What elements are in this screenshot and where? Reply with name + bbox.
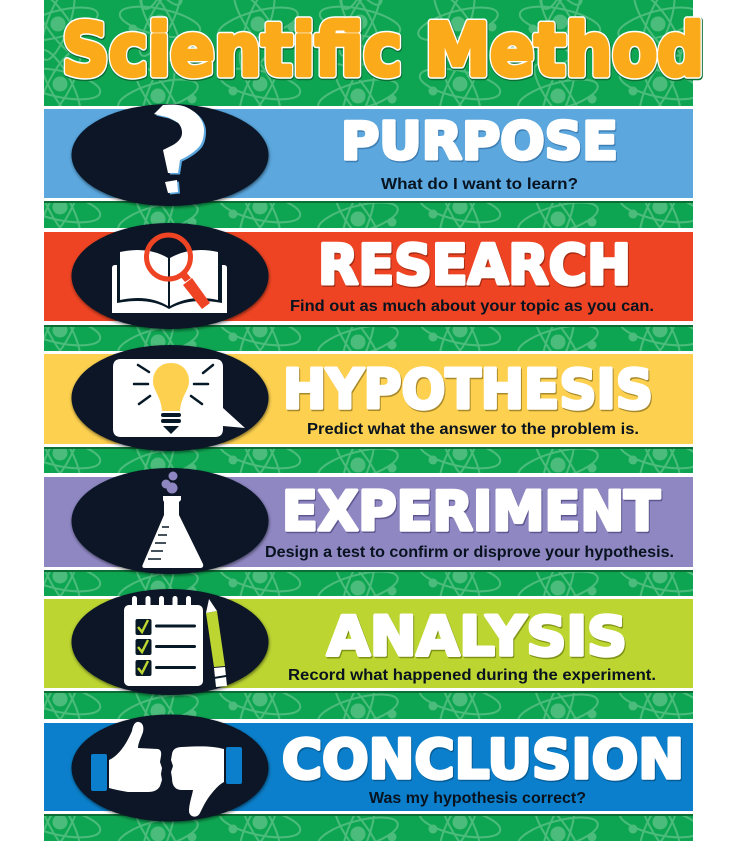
heading: purpose: PURPOSE	[342, 114, 619, 174]
band: purpose	[44, 106, 693, 203]
text: hypothesis prompt: Predict what the answer to the problem is.	[307, 421, 639, 438]
heading: purpose: PURPOSE	[341, 112, 618, 172]
heading: conclusion: CONCLUSION	[283, 730, 685, 792]
heading: analysis: ANALYSIS	[328, 606, 628, 670]
panel: hypothesis	[44, 345, 693, 451]
panel: research	[44, 223, 693, 329]
heading: hypothesis: HYPOTHESIS	[284, 360, 654, 422]
icon: thumbs up and thumbs down	[72, 714, 268, 822]
panel: conclusion	[44, 714, 693, 822]
panel: purpose	[44, 104, 693, 206]
text: conclusion prompt: Was my hypothesis correct?	[369, 790, 586, 807]
band: analysis	[44, 596, 693, 693]
icon: checklist and pencil	[72, 589, 268, 695]
heading: conclusion: CONCLUSION	[282, 728, 684, 791]
band: conclusion	[44, 719, 693, 816]
text: experiment prompt: Design a test to confirm or disprove your hypothesis.	[265, 544, 674, 561]
heading: experiment: EXPERIMENT	[282, 480, 660, 543]
icon: flask	[72, 468, 268, 574]
heading: experiment: EXPERIMENT	[283, 482, 661, 544]
band: research	[44, 228, 693, 327]
heading: analysis: ANALYSIS	[327, 605, 627, 668]
panel: analysis	[44, 589, 693, 695]
text: analysis prompt: Record what happened during the experiment.	[288, 667, 656, 684]
text: purpose prompt: What do I want to learn?	[381, 176, 578, 193]
panel: experiment	[44, 468, 693, 574]
band: experiment	[44, 473, 693, 572]
heading: research: RESEARCH	[318, 233, 631, 297]
band: hypothesis	[44, 351, 693, 449]
heading: research: RESEARCH	[319, 234, 632, 298]
text: research prompt: Find out as much about your topic as you can.	[290, 298, 654, 315]
icon: light bulb in speech bubble	[72, 345, 268, 451]
icon: question mark	[72, 104, 268, 206]
heading: hypothesis: HYPOTHESIS	[283, 358, 653, 421]
icon: book and magnifier	[72, 223, 268, 329]
